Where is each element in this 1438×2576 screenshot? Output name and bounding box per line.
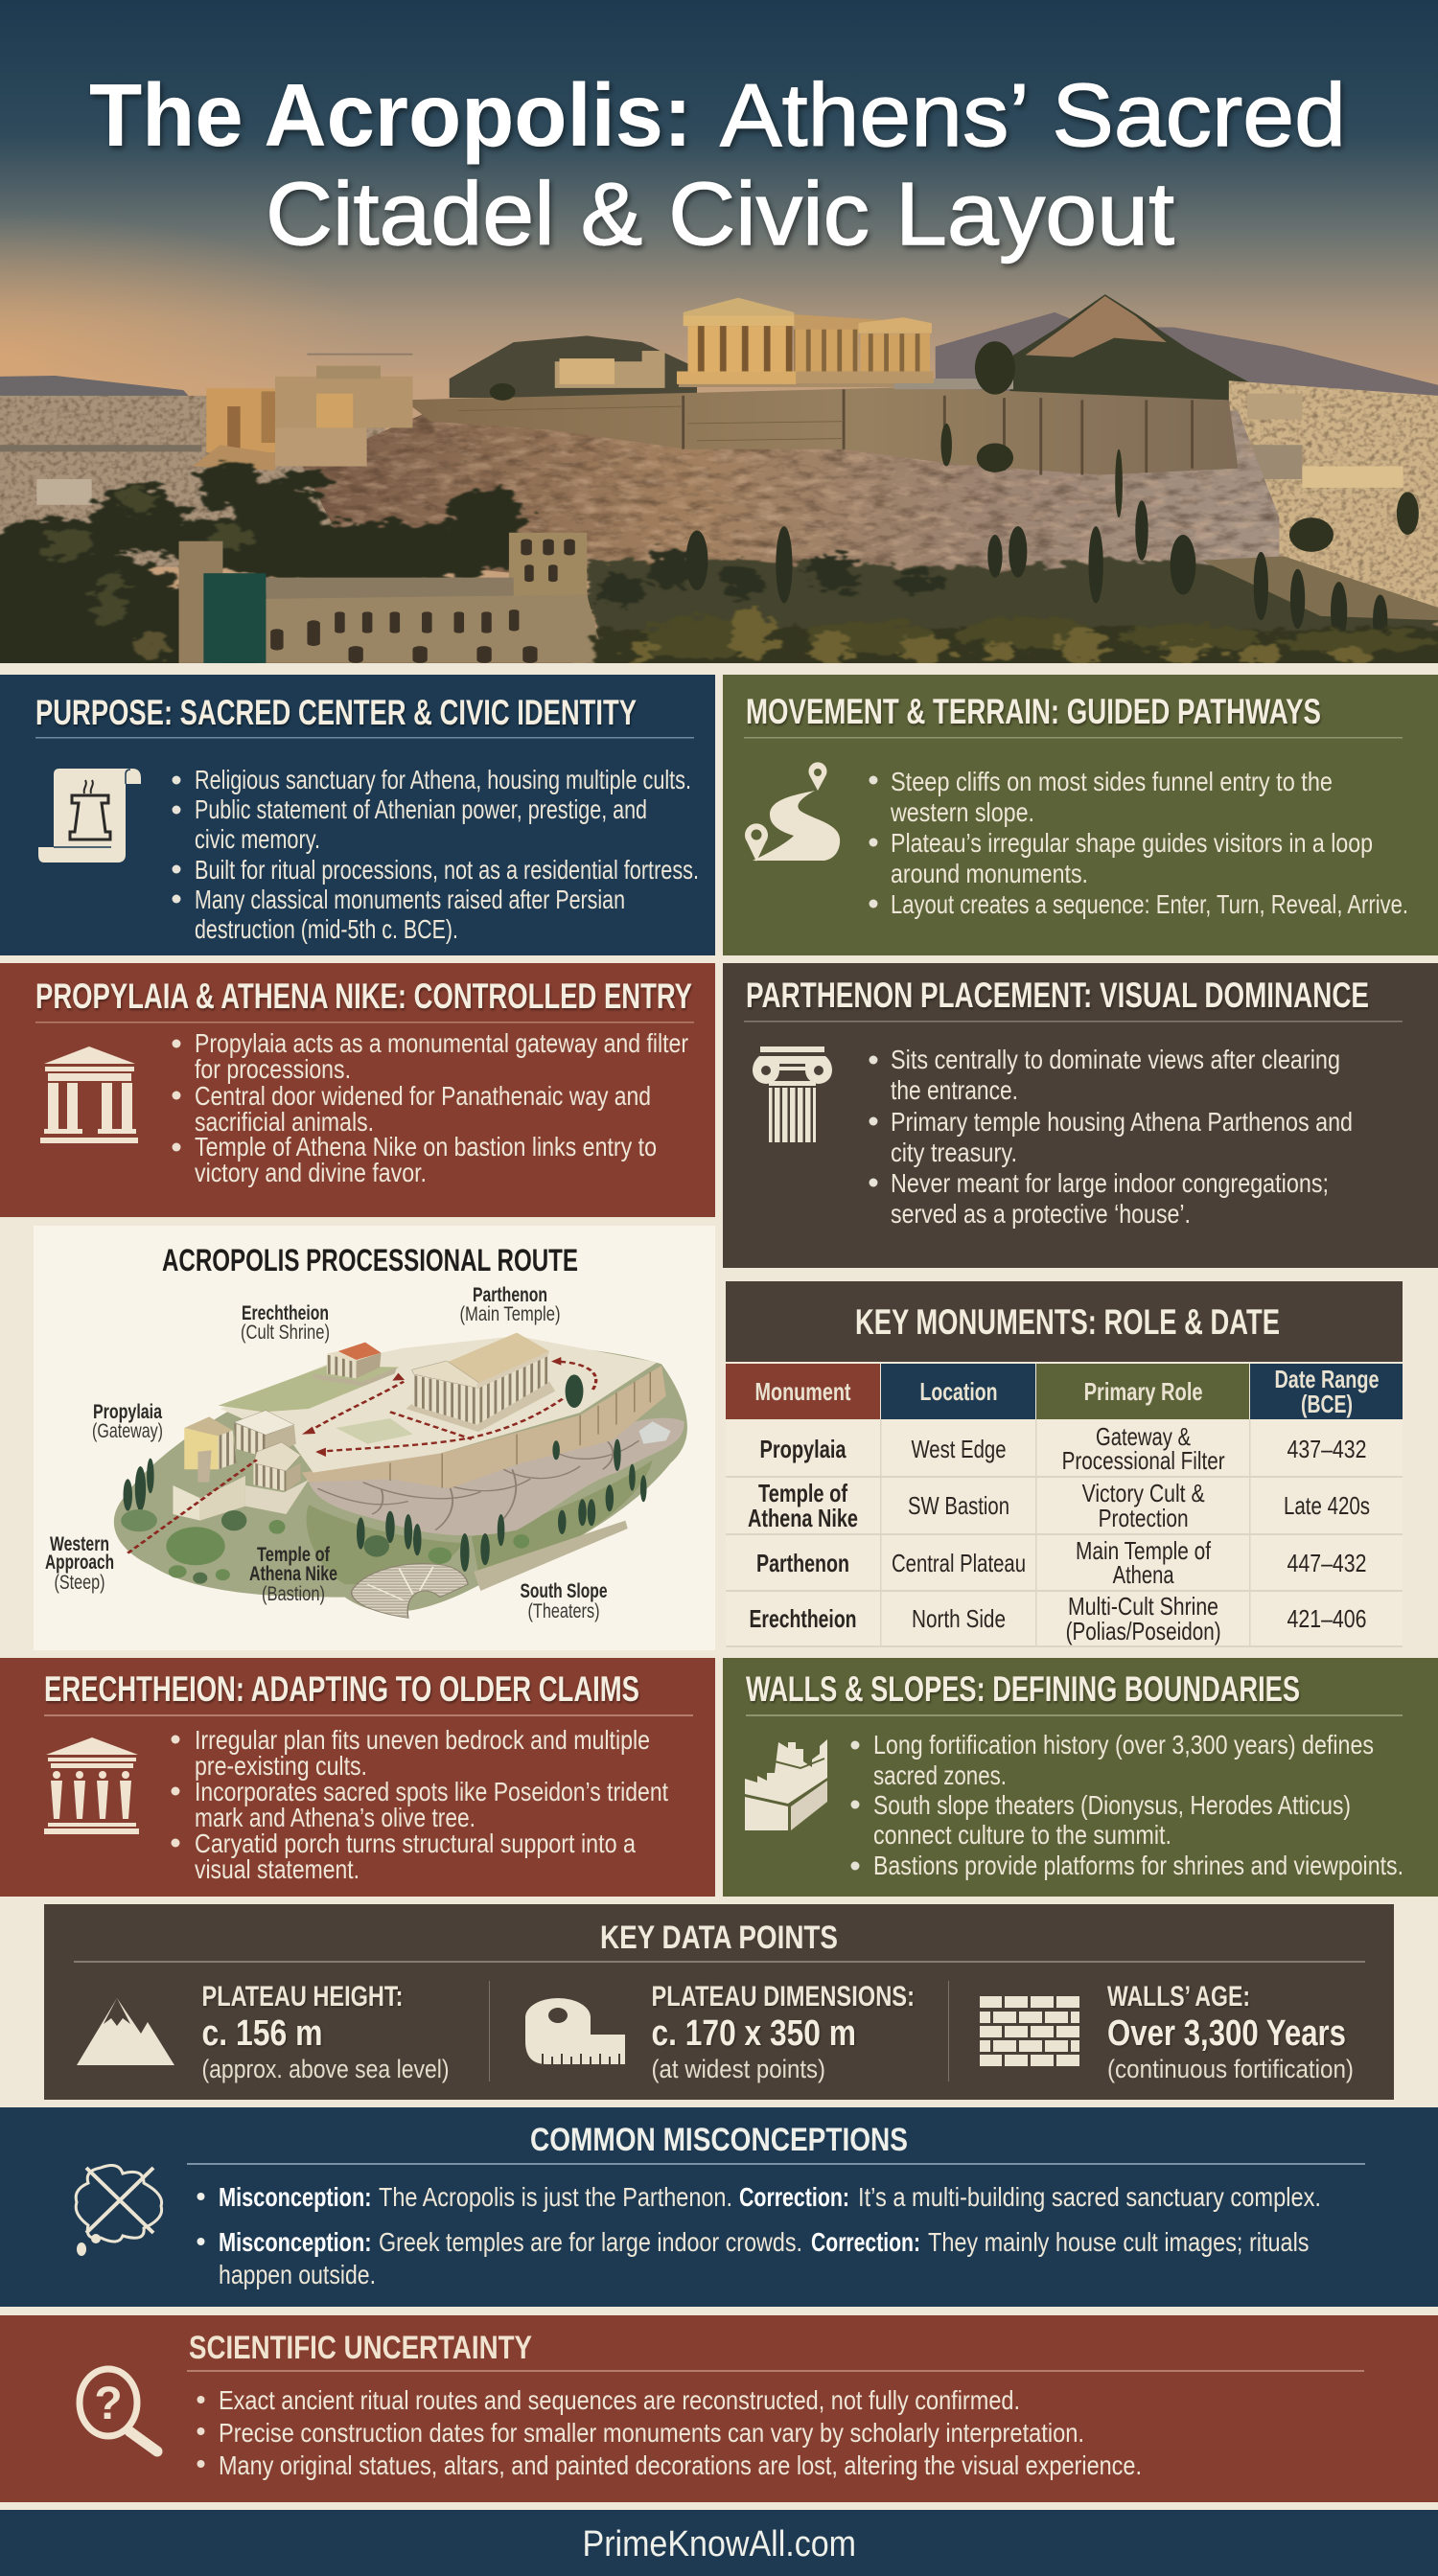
labels: map: (Bastion) <box>262 1583 325 1605</box>
labels: map: South Slope <box>520 1580 608 1602</box>
table body: Protection <box>1099 1504 1189 1532</box>
table body: Propylaia <box>759 1435 847 1463</box>
fortification wall <box>302 1366 666 1488</box>
table header row: (BCE) <box>1301 1390 1353 1418</box>
bullets: uncertainty: Many original statues, altars, and painted decorations are lost, altering the visual experience. <box>219 2450 1142 2480</box>
bullets: walls: sacred zones. <box>873 1760 1007 1790</box>
icon: magnifier with question mark: ? <box>94 2379 123 2429</box>
stat: walls age: (continuous fortification) <box>1107 2055 1354 2083</box>
table body: Erechtheion <box>750 1604 857 1633</box>
labels: map: Athena Nike <box>249 1563 337 1585</box>
table body: Parthenon <box>756 1549 849 1577</box>
icon: fortress wall <box>745 1739 827 1830</box>
bullets: purpose: Religious sanctuary for Athena, housing multiple cults. <box>195 765 691 794</box>
wall ribs <box>458 389 1193 475</box>
Erechtheion <box>555 351 1013 389</box>
icon: crossed-out temple outline <box>76 2166 162 2256</box>
bullets: propylaia <box>173 1028 688 1187</box>
panel: parthenon placement <box>723 963 1438 1268</box>
bullets: movement: Steep cliffs on most sides funnel entry to the <box>891 767 1333 796</box>
distant mountains <box>0 312 1438 399</box>
bullets: parthenon: city treasury. <box>891 1138 1017 1167</box>
illustration: acropolis plateau <box>114 1333 687 1618</box>
stat: plateau height <box>201 1981 449 2083</box>
table body: 421–406 <box>1287 1604 1367 1633</box>
labels: map: (Gateway) <box>92 1420 163 1442</box>
heading: propylaia: PROPYLAIA & ATHENA NIKE: CONTROLLED ENTRY <box>35 977 692 1016</box>
heading: purpose: PURPOSE: SACRED CENTER & CIVIC IDENTITY <box>35 693 637 732</box>
table header row: Date Range <box>1275 1365 1379 1393</box>
text: misconceptions and corrections: Misconception: <box>219 2227 372 2257</box>
icon: ionic column <box>753 1046 832 1142</box>
table body: Gateway & <box>1096 1422 1191 1451</box>
foreground canopy <box>587 542 1438 663</box>
stat: plateau dimensions: (at widest points) <box>652 2055 825 2083</box>
labels: map: (Steep) <box>54 1572 105 1594</box>
mid trees <box>490 341 1419 552</box>
table body: (Polias/Poseidon) <box>1066 1617 1221 1645</box>
table body: West Edge <box>911 1435 1007 1463</box>
rock outcrop <box>309 1418 684 1535</box>
text: misconceptions and corrections: happen outside. <box>219 2260 376 2289</box>
bullets: erechtheion: Irregular plan fits uneven bedrock and multiple <box>195 1725 650 1755</box>
bullets: purpose: destruction (mid-5th c. BCE). <box>195 914 458 944</box>
bullets: propylaia: victory and divine favor. <box>195 1158 427 1187</box>
bullets: purpose: Built for ritual processions, not as a residential fortress. <box>195 855 699 885</box>
stat: walls age: WALLS’ AGE: <box>1107 1981 1250 2012</box>
bullets: erechtheion: pre-existing cults. <box>195 1751 367 1781</box>
bullets: parthenon <box>869 1045 1353 1229</box>
footer: PrimeKnowAll.com <box>583 2524 856 2564</box>
table body: Multi-Cult Shrine <box>1068 1592 1218 1621</box>
table body: Temple of <box>758 1479 847 1507</box>
table body: Central Plateau <box>892 1549 1026 1577</box>
text: misconceptions and corrections: They mainly house cult images; rituals <box>928 2227 1310 2257</box>
panel: processional route map <box>34 1226 715 1650</box>
text: misconceptions and corrections: Greek temples are for large indoor crowds. <box>379 2227 802 2257</box>
slope below rock <box>585 556 1438 663</box>
bullets: movement <box>869 767 1408 919</box>
labels: map: Propylaia <box>93 1401 162 1423</box>
panel: key data points <box>44 1904 1394 2100</box>
stat: walls age: Over 3,300 Years <box>1107 2013 1346 2054</box>
table body: Late 420s <box>1284 1491 1370 1520</box>
labels: map: (Cult Shrine) <box>241 1322 330 1344</box>
table body: North Side <box>912 1604 1006 1633</box>
panel: scientific uncertainty <box>0 2315 1438 2502</box>
bullets: propylaia: Temple of Athena Nike on bastion links entry to <box>195 1132 657 1162</box>
heading: uncertainty: SCIENTIFIC UNCERTAINTY <box>189 2330 532 2366</box>
bullets: parthenon: the entrance. <box>891 1075 1018 1105</box>
table body: 447–432 <box>1287 1549 1367 1577</box>
table header row: Location <box>920 1377 997 1406</box>
icon: caryatid porch <box>44 1737 139 1834</box>
bullets: erechtheion: Caryatid porch turns structural support into a <box>195 1828 637 1858</box>
Parthenon <box>677 298 934 384</box>
table header row: Primary Role <box>1084 1377 1203 1406</box>
bullets: erechtheion: visual statement. <box>195 1854 360 1884</box>
table body <box>726 1419 1403 1647</box>
bullets: parthenon: Sits centrally to dominate views after clearing <box>891 1045 1340 1074</box>
text: misconceptions and corrections: Misconception: <box>219 2182 372 2212</box>
labels: map <box>45 1284 608 1622</box>
bullets: propylaia: sacrificial animals. <box>195 1107 374 1137</box>
processional route <box>128 1362 596 1553</box>
Erechtheion model <box>313 1343 397 1387</box>
stat: plateau height: c. 156 m <box>201 2013 322 2054</box>
terrace <box>474 1521 628 1591</box>
panel: propylaia and athena nike <box>0 963 715 1217</box>
city left and right <box>0 380 1438 625</box>
bullets: uncertainty: Exact ancient ritual routes and sequences are reconstructed, not fully confirmed. <box>219 2385 1020 2415</box>
table body: Victory Cult & <box>1082 1479 1205 1507</box>
stat: plateau dimensions: PLATEAU DIMENSIONS: <box>652 1981 915 2012</box>
text: misconceptions and corrections: Correction: <box>739 2182 849 2212</box>
bullets: movement: western slope. <box>890 797 1034 827</box>
text: misconceptions and corrections: It’s a multi-building sacred sanctuary complex. <box>858 2182 1321 2212</box>
bullets: walls: connect culture to the summit. <box>873 1820 1171 1850</box>
bullets: purpose: Public statement of Athenian power, prestige, and <box>195 794 647 824</box>
bullets: propylaia: Propylaia acts as a monumental gateway and filter <box>195 1028 688 1058</box>
Temple of Athena Nike model <box>245 1442 309 1514</box>
rock <box>303 411 1279 590</box>
heading: key data: KEY DATA POINTS <box>600 1920 838 1956</box>
table header row: Monument <box>755 1377 851 1406</box>
bullets: purpose: civic memory. <box>195 824 320 854</box>
bullets: propylaia: Central door widened for Panathenaic way and <box>195 1081 651 1111</box>
stat: walls age <box>1107 1981 1354 2083</box>
route arrowheads <box>302 1357 561 1457</box>
labels: map: Western <box>50 1533 109 1555</box>
cypresses <box>686 500 1387 646</box>
table body: Athena Nike <box>748 1504 858 1532</box>
title <box>89 65 1346 264</box>
bullets: purpose: Many classical monuments raised after Persian <box>195 885 625 914</box>
bullets: walls: South slope theaters (Dionysus, Herodes Atticus) <box>873 1790 1351 1820</box>
bullets: movement: around monuments. <box>891 859 1088 888</box>
left tree mass <box>0 459 573 663</box>
footer <box>0 2510 1438 2576</box>
heading: misconceptions: COMMON MISCONCEPTIONS <box>530 2122 908 2158</box>
bullets: parthenon: served as a protective ‘house’. <box>891 1199 1191 1229</box>
bullets: propylaia: for processions. <box>195 1054 351 1084</box>
icon: winding path with pins <box>745 762 840 862</box>
icon: brick wall <box>980 1996 1079 2066</box>
table body: 437–432 <box>1287 1435 1367 1463</box>
panel: movement and terrain <box>723 675 1438 955</box>
stat: plateau dimensions: c. 170 x 350 m <box>652 2013 856 2054</box>
trees <box>121 1374 647 1584</box>
icon: tape measure <box>525 1998 625 2064</box>
bullets: erechtheion <box>171 1725 668 1884</box>
panel: common misconceptions <box>0 2107 1438 2307</box>
panel: erechtheion <box>0 1658 715 1897</box>
bullets: purpose <box>173 765 699 944</box>
title: Citadel & Civic Layout <box>266 164 1174 264</box>
panel: walls and slopes <box>723 1658 1438 1897</box>
stat: plateau height: PLATEAU HEIGHT: <box>201 1981 403 2012</box>
icon: gateway temple <box>40 1046 138 1143</box>
title: Athens’ Sacred <box>720 65 1346 165</box>
title: The Acropolis: <box>89 65 692 165</box>
Propylaia model <box>173 1411 296 1521</box>
text: misconceptions and corrections <box>197 2182 1321 2289</box>
text: misconceptions and corrections: Correction: <box>811 2227 920 2257</box>
heading: table title: KEY MONUMENTS: ROLE & DATE <box>855 1302 1280 1342</box>
bullets: parthenon: Never meant for large indoor congregations; <box>891 1168 1329 1198</box>
fortification walls <box>404 387 1238 475</box>
labels: map: Erechtheion <box>242 1302 329 1324</box>
bullets: erechtheion: mark and Athena’s olive tree. <box>195 1803 475 1832</box>
hero photo: Acropolis at sunset <box>0 0 1438 693</box>
heading: erechtheion: ERECHTHEION: ADAPTING TO OLDER CLAIMS <box>44 1669 639 1709</box>
table header row <box>726 1364 1403 1419</box>
panel: key monuments table <box>726 1281 1403 1647</box>
labels: map: Temple of <box>257 1544 331 1566</box>
panel: purpose <box>0 675 715 955</box>
Propylaia <box>193 354 412 471</box>
labels: map: Approach <box>45 1552 114 1574</box>
stat: plateau dimensions <box>652 1981 915 2083</box>
theater <box>352 1564 468 1618</box>
table body: Athena <box>1113 1560 1174 1589</box>
bullets: uncertainty <box>197 2385 1142 2480</box>
bullets: parthenon: Primary temple housing Athena Parthenos and <box>891 1107 1353 1137</box>
labels: map: (Main Temple) <box>460 1303 560 1325</box>
labels: map: (Theaters) <box>527 1600 600 1622</box>
text: misconceptions and corrections: The Acropolis is just the Parthenon. <box>379 2182 732 2212</box>
heading: map title: ACROPOLIS PROCESSIONAL ROUTE <box>162 1243 578 1277</box>
table body: Main Temple of <box>1076 1536 1212 1565</box>
labels: map: Parthenon <box>473 1284 547 1306</box>
Odeon of Herodes Atticus <box>179 533 605 663</box>
table body: SW Bastion <box>908 1491 1009 1520</box>
table body: Processional Filter <box>1062 1446 1225 1475</box>
bullets: erechtheion: Incorporates sacred spots like Poseidon’s trident <box>195 1777 668 1806</box>
icon: magnifier with question mark <box>80 2369 157 2451</box>
Parthenon model <box>406 1333 555 1432</box>
icon: mountain <box>77 1998 174 2065</box>
stat: plateau height: (approx. above sea level) <box>201 2055 449 2083</box>
icon: scroll with altar <box>38 769 141 862</box>
Lycabettus hill <box>1009 294 1258 402</box>
bullets: uncertainty: Precise construction dates for smaller monuments can vary by scholarly interpretation. <box>219 2418 1084 2448</box>
plateau surface <box>220 1336 657 1473</box>
bullets: walls <box>851 1730 1403 1880</box>
